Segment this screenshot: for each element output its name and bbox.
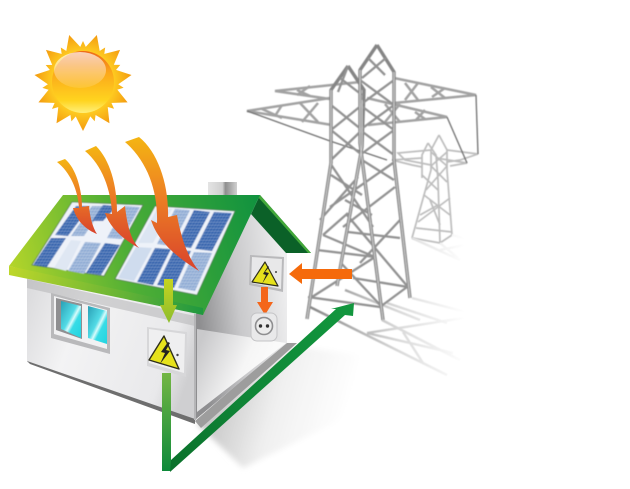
gable wall	[195, 212, 287, 420]
warning triangle	[149, 336, 179, 369]
distant transmission tower	[392, 135, 478, 243]
orange arrow from grid to house	[289, 263, 352, 284]
lightning bolt	[160, 342, 170, 364]
tower lattice bracing	[308, 58, 408, 307]
warning triangle	[252, 262, 278, 286]
window	[51, 293, 110, 354]
orange sun arrow 2	[85, 146, 139, 248]
wall base shadow	[27, 361, 195, 424]
left wall	[27, 275, 195, 420]
house	[27, 212, 287, 424]
ground shadow of house	[195, 343, 375, 468]
tower cross arms	[247, 78, 476, 125]
lightning bolt	[262, 266, 269, 284]
tower leg highlights	[307, 70, 410, 320]
power socket	[251, 313, 277, 341]
tower legs	[307, 45, 410, 320]
house corner	[194, 314, 196, 420]
orange sun arrow 1	[57, 159, 97, 234]
chimney	[208, 182, 237, 198]
gable wall lit area	[197, 329, 286, 412]
main transmission towers	[247, 45, 478, 320]
yellow-green arrow down to meter	[160, 279, 177, 323]
small orange arrow to socket	[257, 287, 273, 315]
tower shadows on the ground	[310, 235, 470, 375]
sun	[33, 31, 133, 131]
tower support wires	[247, 95, 478, 163]
solar panel: right	[115, 206, 235, 295]
electric meter box	[147, 327, 187, 377]
solar panel: left	[32, 202, 143, 276]
roof surface	[9, 195, 260, 315]
green feed-in arrow to grid	[170, 303, 354, 472]
roof gable edge	[251, 195, 311, 253]
green feed-in line: vertical	[162, 373, 171, 471]
roof front edge	[9, 266, 203, 315]
roof	[9, 195, 311, 315]
orange sun arrow 3	[125, 137, 199, 271]
indoor panel box	[249, 255, 284, 292]
eave shadow	[27, 279, 195, 326]
